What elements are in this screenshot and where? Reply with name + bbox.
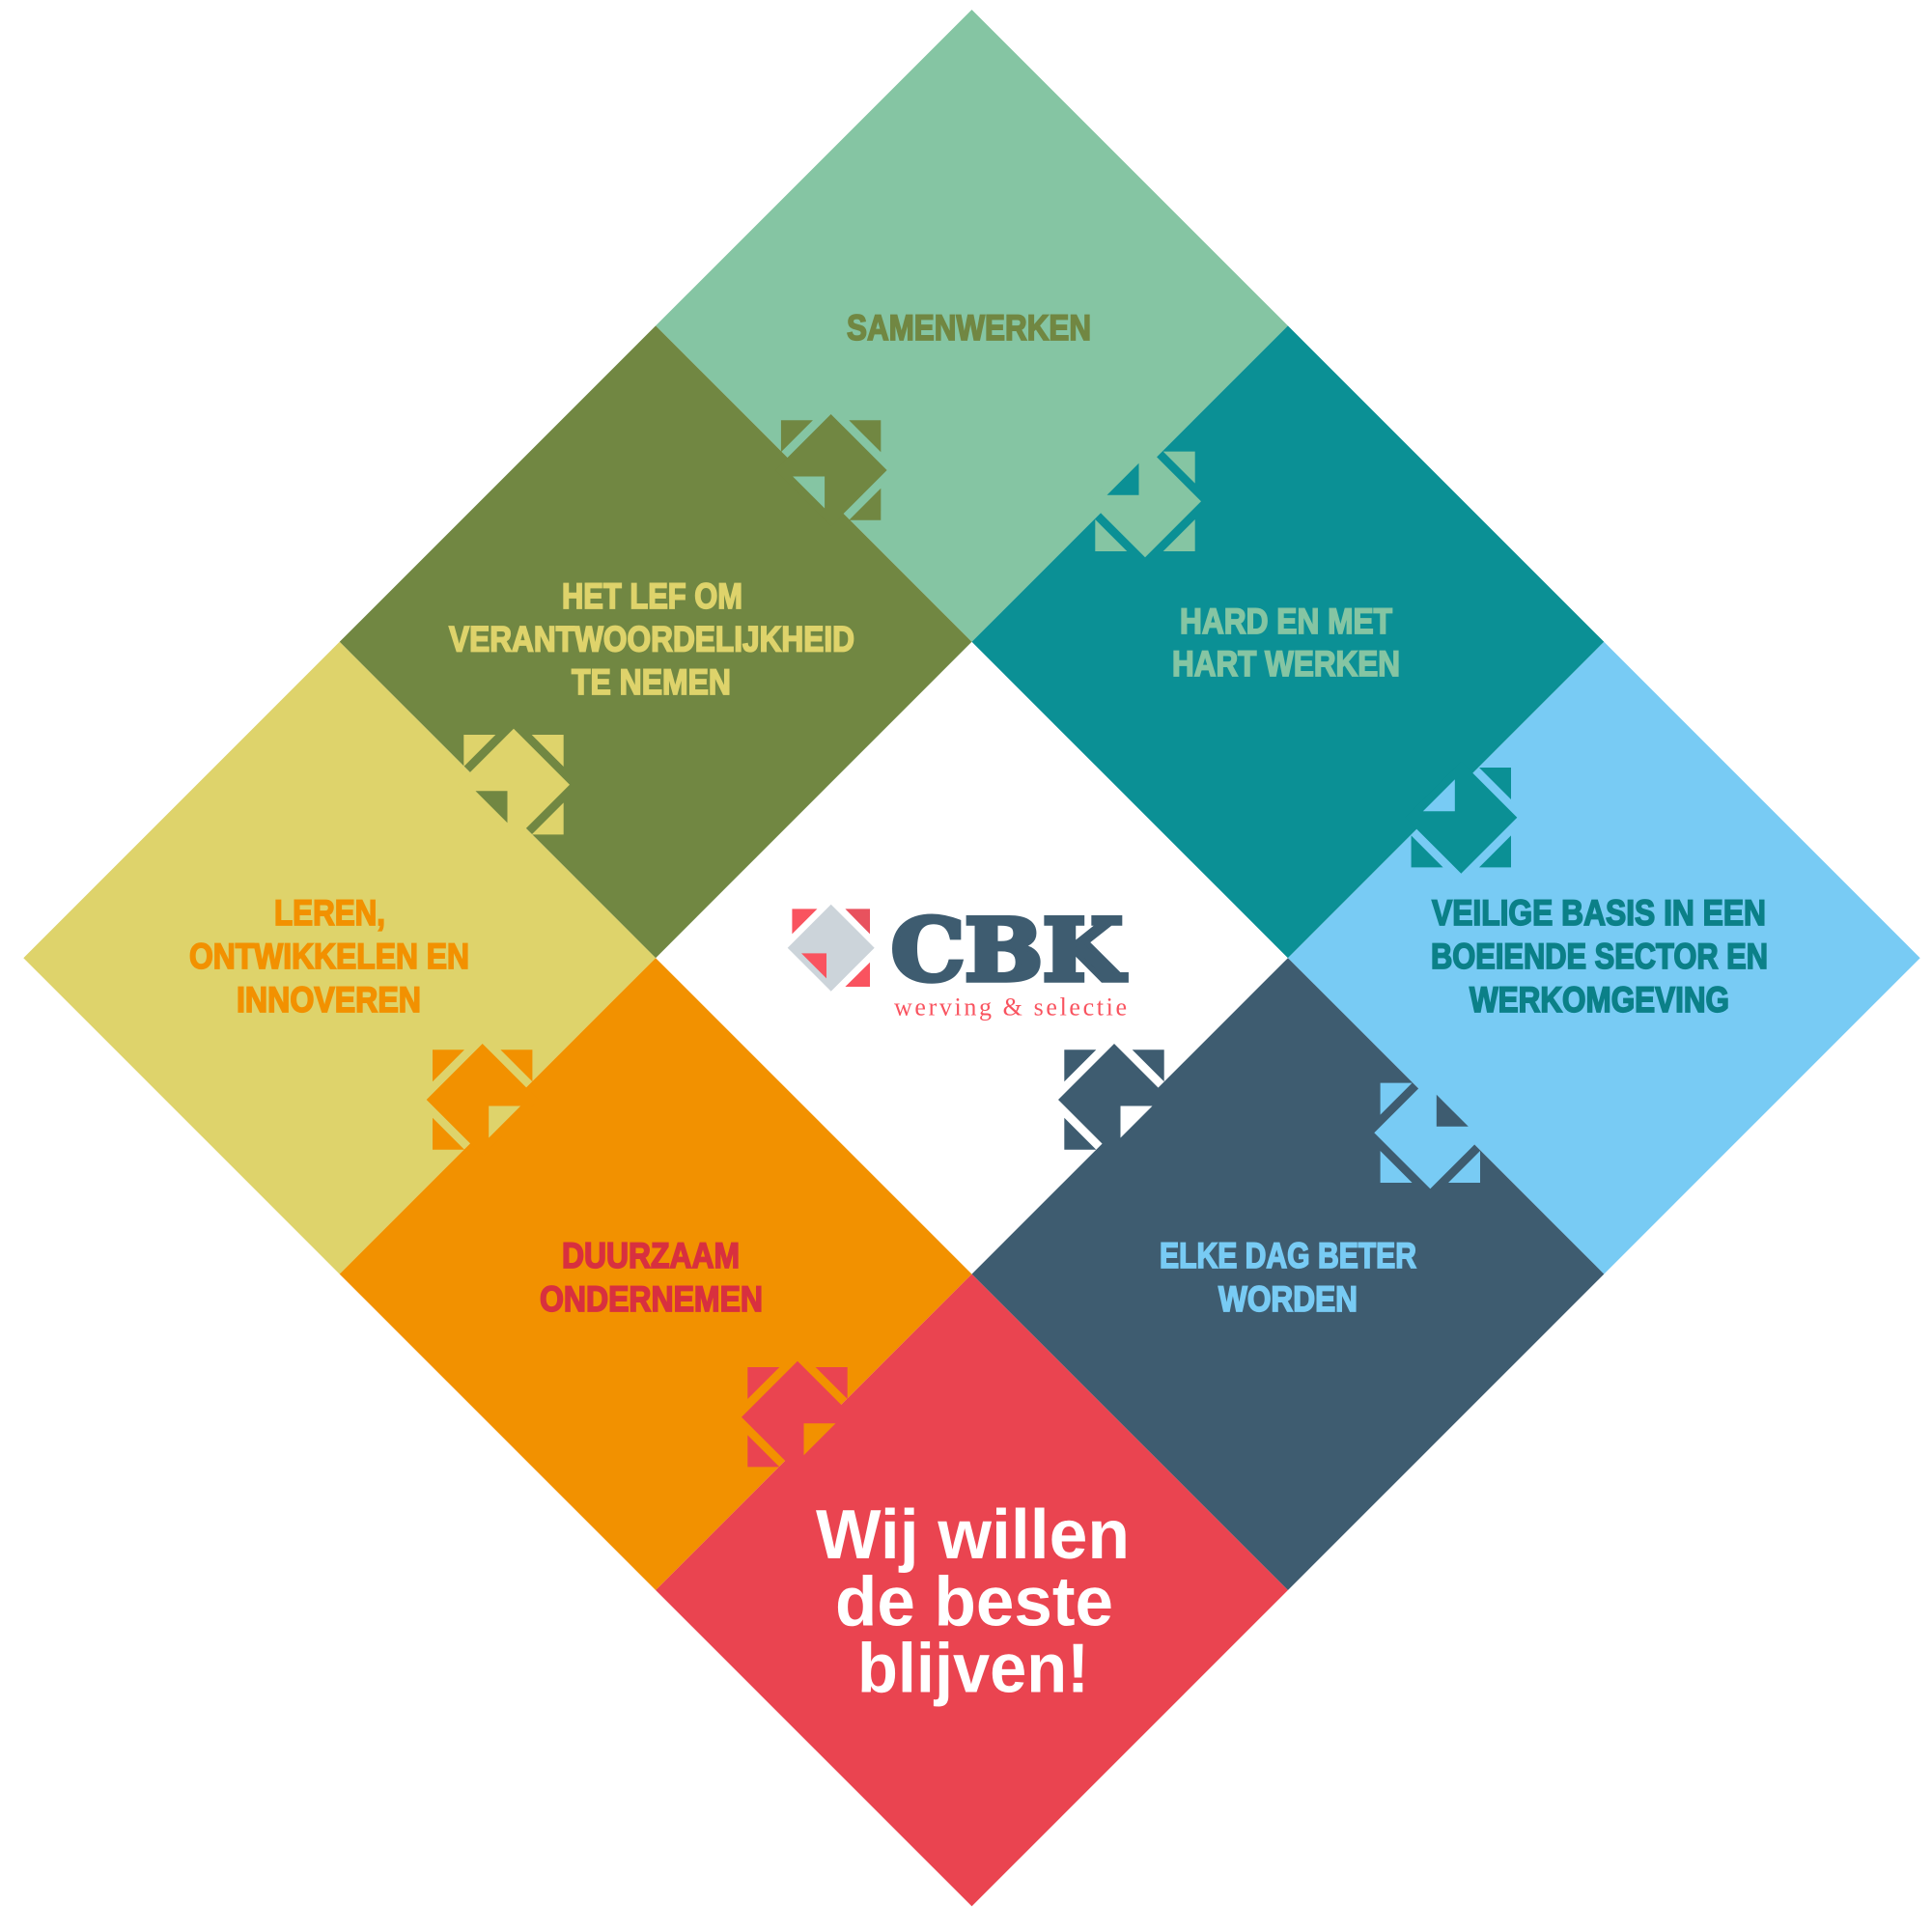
label: hard en met hart werken: HART WERKEN	[1172, 644, 1400, 684]
label: leren ontwikkelen en innoveren	[189, 893, 469, 1020]
label: hard en met hart werken: HARD EN MET	[1180, 602, 1392, 641]
label: samenwerken: SAMENWERKEN	[847, 308, 1091, 348]
label: veilige basis in een boeiende sector en werkomgeving	[1431, 893, 1768, 1020]
label: veilige basis in een boeiende sector en werkomgeving: BOEIENDE SECTOR EN	[1431, 937, 1768, 976]
tile: duurzaam ondernemen	[340, 958, 971, 1590]
icon: green tile mark	[1089, 445, 1201, 557]
icon: olive tile mark	[775, 414, 887, 526]
label: leren ontwikkelen en innoveren: LEREN,	[274, 893, 385, 933]
logo: CBK werving en selectie	[788, 900, 1127, 1021]
icon: light blue tile mark	[1374, 1077, 1486, 1189]
label: duurzaam ondernemen: DUURZAAM	[562, 1236, 740, 1275]
label: het lef om verantwoordelijkheid te nemen: HET LEF OM	[562, 576, 742, 616]
tile: leren	[23, 642, 656, 1274]
icon: yellow tile mark	[458, 729, 570, 841]
label: het lef om verantwoordelijkheid te nemen: TE NEMEN	[572, 662, 731, 702]
tile: het lef	[340, 325, 971, 958]
label: leren ontwikkelen en innoveren: ONTWIKKELEN EN	[189, 937, 469, 976]
label: duurzaam ondernemen: ONDERNEMEN	[540, 1279, 763, 1319]
heading: wij willen de beste blijven: blijven!	[857, 1631, 1089, 1708]
icon: teal tile mark	[1405, 762, 1517, 874]
logo wordmark: CBK	[891, 900, 1127, 1000]
label: veilige basis in een boeiende sector en werkomgeving: WERKOMGEVING	[1470, 980, 1729, 1020]
logo tagline: werving & selectie	[894, 993, 1127, 1021]
icon: red tile mark	[742, 1361, 854, 1473]
heading: wij willen de beste blijven: Wij willen	[816, 1497, 1130, 1574]
heading: wij willen de beste blijven: de beste	[835, 1563, 1113, 1640]
heading: wij willen de beste blijven	[816, 1497, 1130, 1708]
label: het lef om verantwoordelijkheid te nemen: VERANTWOORDELIJKHEID	[449, 620, 854, 658]
tile: wij willen	[656, 1274, 1288, 1906]
tile: elke dag beter	[971, 958, 1604, 1590]
icon: dark blue tile mark	[1058, 1044, 1170, 1156]
tile: samenwerken	[656, 10, 1288, 642]
label: leren ontwikkelen en innoveren: INNOVEREN	[237, 980, 421, 1020]
label: hard en met hart werken	[1172, 602, 1400, 684]
label: elke dag beter worden	[1160, 1236, 1416, 1319]
logo mark	[788, 905, 875, 992]
tile: veilige basis	[1288, 642, 1920, 1274]
label: elke dag beter worden: ELKE DAG BETER	[1160, 1236, 1416, 1275]
label: het lef om verantwoordelijkheid te nemen	[449, 576, 854, 702]
icon: orange tile mark	[427, 1044, 539, 1156]
label: elke dag beter worden: WORDEN	[1218, 1279, 1358, 1319]
tile: hard en met hart werken	[971, 325, 1604, 958]
label: duurzaam ondernemen	[540, 1236, 763, 1319]
label: veilige basis in een boeiende sector en werkomgeving: VEILIGE BASIS IN EEN	[1432, 893, 1766, 933]
